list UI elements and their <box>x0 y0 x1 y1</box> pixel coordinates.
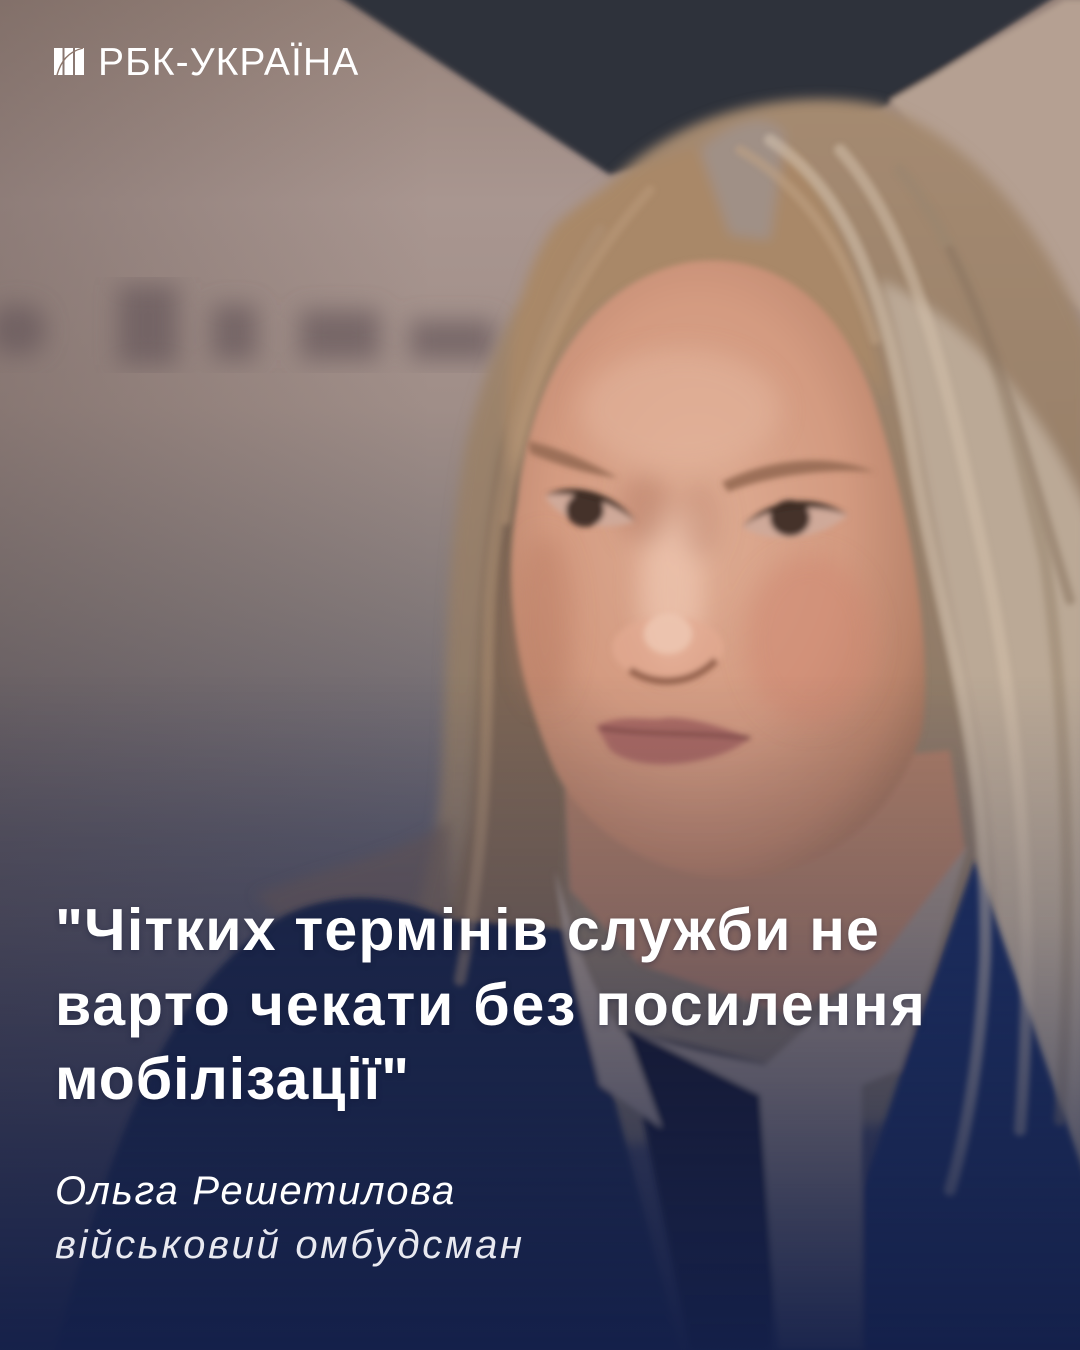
nose <box>612 616 724 680</box>
speaker name: Ольга Решетилова <box>55 1169 456 1213</box>
mouth <box>596 718 750 764</box>
eyes <box>545 491 634 526</box>
logo wordmark: РБК-УКРАЇНА <box>98 41 359 84</box>
eyebrows <box>528 441 618 478</box>
neck <box>565 750 965 1015</box>
heading: quote <box>55 897 927 1112</box>
icon: logo mark <box>54 48 84 75</box>
blurred wall lettering <box>0 285 495 365</box>
jacket <box>55 898 680 1350</box>
logo: РБК-Україна <box>54 41 359 84</box>
heading: quote: мобілізації" <box>55 1046 410 1112</box>
hair back <box>409 99 1080 1270</box>
hair strands <box>460 140 1070 1190</box>
face <box>511 260 925 878</box>
speaker role: військовий омбудсман <box>55 1223 525 1267</box>
collar <box>555 870 662 1128</box>
heading: quote: варто чекати без посилення <box>55 972 927 1038</box>
heading: quote: "Чітких термінів служби не <box>55 897 880 963</box>
